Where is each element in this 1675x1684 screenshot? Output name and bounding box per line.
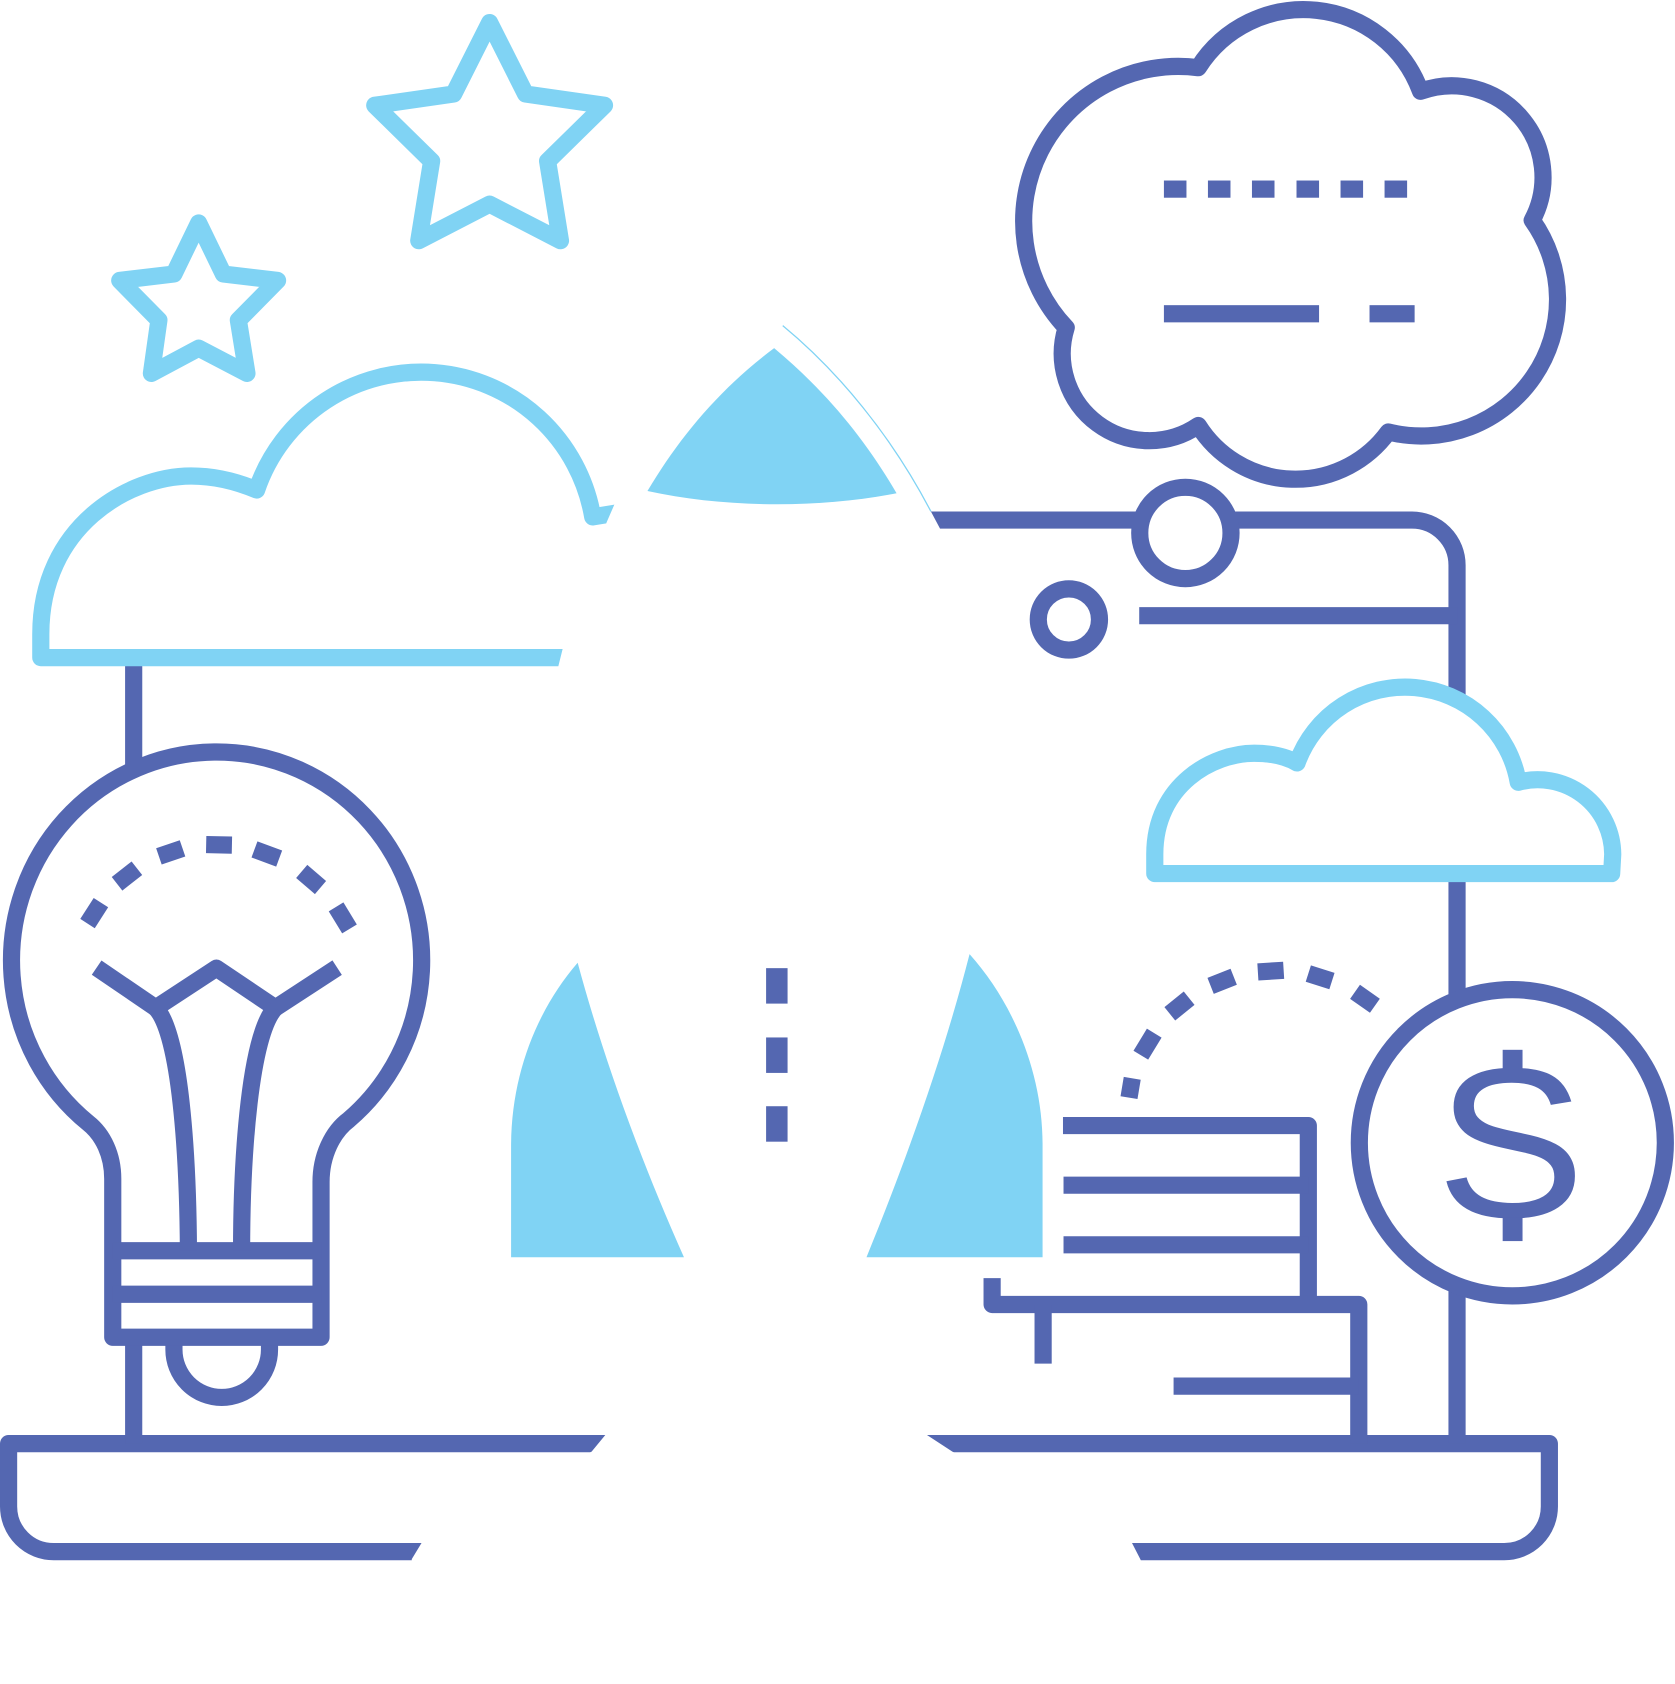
cloud: large light-blue left — [41, 372, 623, 658]
icon: dollar coin — [1359, 990, 1665, 1296]
connector lines: lightbulb to cloud and laptop — [126, 658, 142, 1444]
dashed arc above stacked lines — [1129, 970, 1375, 1098]
node circle large — [1140, 487, 1231, 579]
node circle small — [1038, 589, 1099, 650]
bulb glass and base — [11, 752, 422, 1337]
rocket right fin — [866, 954, 1043, 1257]
laptop base — [9, 1444, 1549, 1552]
bulb base rings — [113, 1251, 321, 1294]
icon: small star — [120, 223, 278, 373]
cloud: small light-blue right — [1155, 687, 1613, 874]
connector lines: right column and top branch — [923, 520, 1457, 1444]
rocket left fin — [511, 963, 684, 1257]
thought cloud lines — [1164, 305, 1415, 322]
thought cloud — [1024, 10, 1558, 479]
rocket nose — [647, 348, 897, 504]
white rocket body — [412, 318, 1149, 1580]
bulb filament — [97, 968, 337, 1251]
icon: large star — [375, 23, 605, 241]
rocket center dashes — [766, 968, 788, 1142]
bulb tip — [174, 1337, 270, 1397]
rocket nose highlight — [783, 326, 931, 511]
stacked lines and bracket — [992, 1126, 1359, 1444]
thought cloud dashed row — [1164, 181, 1407, 198]
bulb glow dashes — [88, 845, 349, 929]
icon: lightbulb — [11, 752, 422, 1397]
dollar sign: S — [1436, 1025, 1585, 1262]
